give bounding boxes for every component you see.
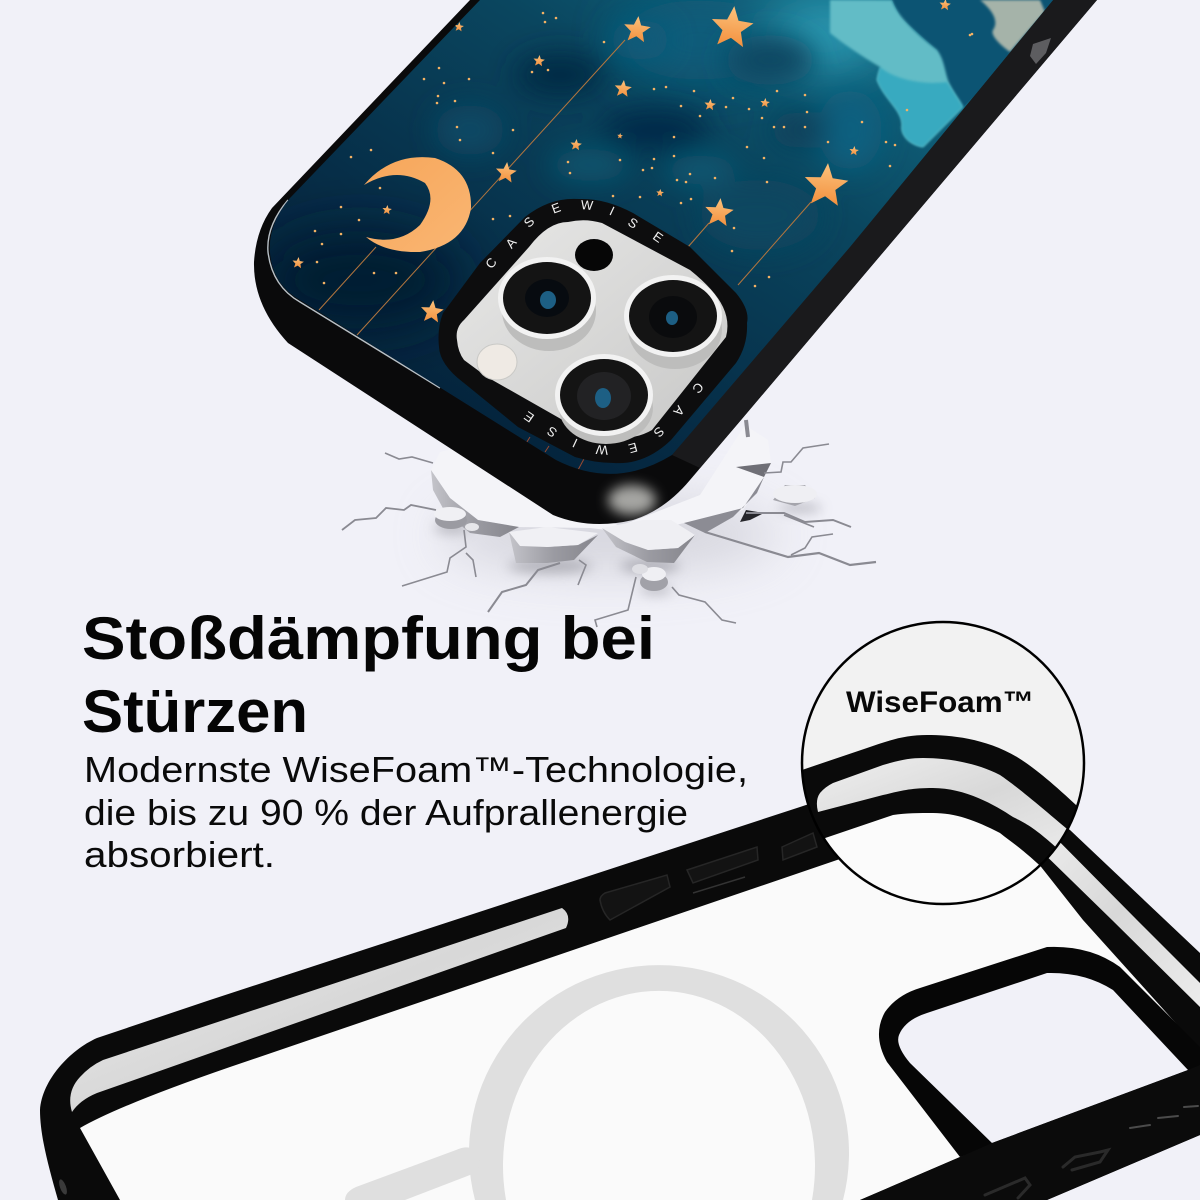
star dust [315, 13, 972, 286]
bump lettering: CASEWISE: S [625, 214, 641, 232]
stones bottom [632, 564, 668, 591]
rubble chunk centre side [602, 528, 695, 563]
bright cloud [877, 67, 963, 147]
glare line on bezel [268, 200, 440, 388]
rubble shadows [434, 504, 822, 594]
magnifier background [800, 620, 1090, 910]
bump lettering: CASEWISE: E [627, 440, 639, 456]
bump lettering: CASEWISE: A [502, 235, 520, 251]
printed artwork [270, 0, 1053, 474]
bump lettering: CASEWISE [482, 197, 707, 458]
MagSafe pill [345, 1147, 480, 1200]
notch shadow [736, 463, 771, 477]
lens two [624, 275, 722, 369]
callout magnifier: WiseFoam corner detail [803, 735, 1076, 865]
heading: Stoßdämpfung bei [82, 605, 655, 672]
foam gap left [70, 908, 568, 1112]
bump lettering: CASEWISE: A [670, 403, 688, 419]
heading: Stürzen [82, 678, 308, 745]
side button reflection [1030, 38, 1051, 64]
foam gap right [1030, 822, 1200, 1007]
bezel grey right side [672, 0, 1097, 468]
illustration: cracked surface [342, 420, 876, 627]
dark crevice [740, 510, 764, 522]
lens three [555, 354, 653, 444]
hole in side rail [57, 1178, 69, 1196]
rubble chunk left side [509, 532, 598, 563]
callout circle outline [802, 622, 1084, 904]
bump lettering: CASEWISE: I [570, 435, 580, 451]
bump lettering: CASEWISE: W [595, 442, 609, 458]
bump lettering: CASEWISE: E [549, 199, 563, 217]
sky mottling [435, 20, 882, 250]
moon [364, 157, 471, 252]
bump lettering: CASEWISE: C [689, 380, 707, 396]
port details [985, 1150, 1108, 1198]
crack lines [342, 420, 876, 627]
ground shadow under phone [440, 497, 780, 573]
bump lettering: CASEWISE: W [580, 197, 594, 213]
pale cloud [830, 0, 963, 147]
right slab edge [684, 477, 764, 533]
texture stripes [1130, 1106, 1198, 1128]
case body [254, 0, 1097, 524]
side buttons [600, 833, 817, 920]
body text: Modernste WiseFoam™-Technologie, [84, 749, 748, 790]
body text [84, 749, 748, 875]
bump lettering: CASEWISE: I [607, 203, 617, 219]
beige cloud [980, 0, 1045, 52]
magnified clear panel [825, 813, 1039, 903]
corner reflection [608, 485, 656, 515]
bottom rail of case [860, 1065, 1200, 1200]
bump lettering: CASEWISE: S [650, 424, 667, 441]
body text: die bis zu 90 % der Aufprallenergie [84, 792, 688, 833]
camera cutout frame [879, 947, 1200, 1157]
heading [82, 605, 655, 745]
phone with case, top [250, 0, 1097, 524]
star strings [319, 40, 811, 470]
left slab edge [431, 470, 519, 537]
stars [292, 0, 951, 323]
camera plate [457, 220, 727, 438]
bump lettering: CASEWISE: E [650, 228, 666, 246]
bump lettering: CASEWISE: S [521, 213, 538, 230]
rubble chunk left top [509, 527, 598, 547]
rubble chunk centre top [602, 520, 695, 550]
body text: absorbiert. [84, 834, 275, 875]
MagSafe ring [469, 965, 849, 1200]
rail highlight line [693, 877, 745, 893]
stone right [773, 485, 817, 506]
camera cutout window [898, 973, 1188, 1143]
lens one [498, 257, 596, 351]
bump lettering: CASEWISE: S [544, 423, 560, 441]
bump lettering: CASEWISE: E [521, 408, 537, 426]
bump lettering: CASEWISE: C [482, 255, 500, 271]
magnified outer bar and inner bar [803, 735, 1076, 865]
open clear case, bottom [40, 752, 1200, 1200]
dark blue patch top right [892, 0, 1060, 107]
black frame [40, 752, 1200, 1200]
clear back panel [80, 805, 1200, 1200]
magnified foam layer [816, 758, 1066, 846]
flash [477, 344, 517, 380]
night sky base [270, 0, 1053, 474]
stone left [434, 507, 479, 531]
camera bump frame [438, 199, 748, 463]
upper slabs around impact [431, 425, 771, 534]
mic hole [575, 239, 613, 271]
sky texture blobs [260, 0, 885, 330]
callout label: WiseFoam™ [846, 686, 1034, 719]
